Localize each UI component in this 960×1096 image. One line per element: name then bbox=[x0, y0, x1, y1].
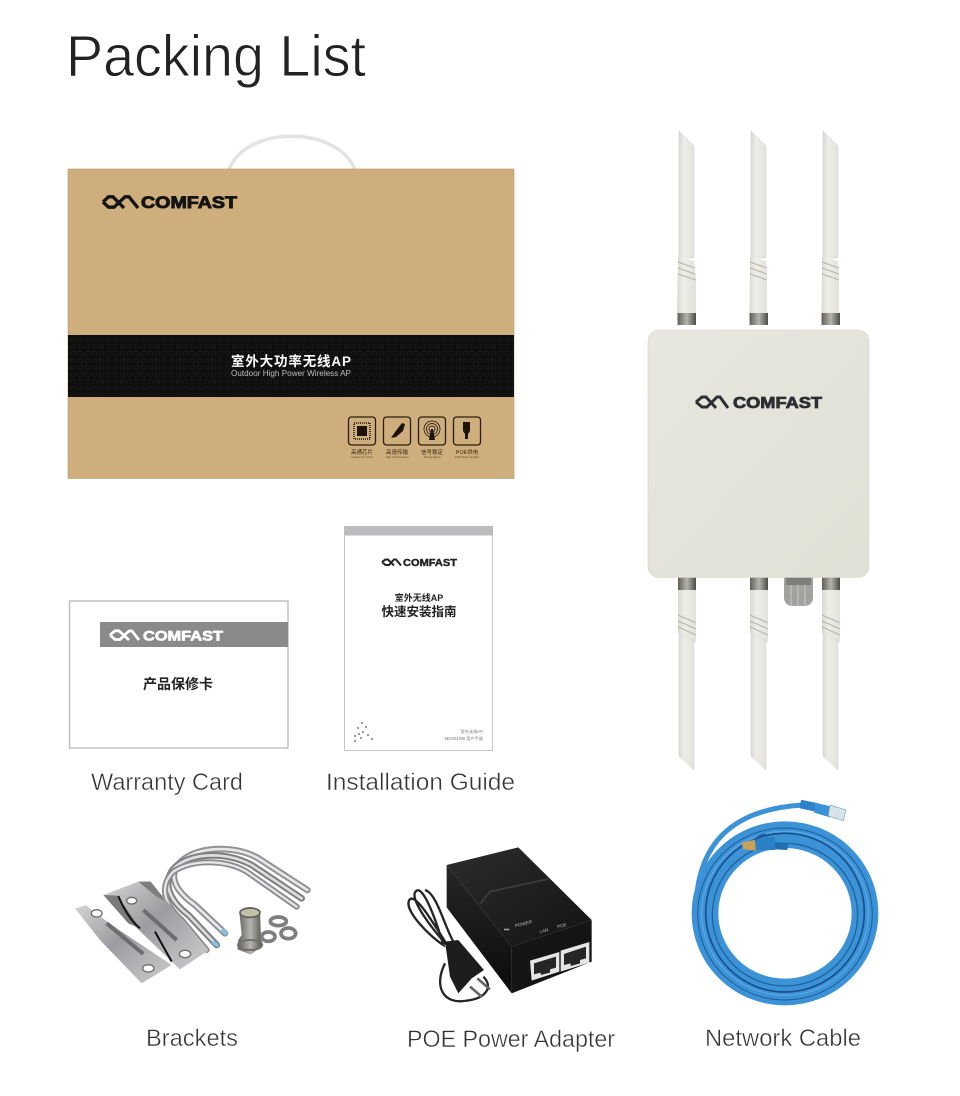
illustration: network cable bbox=[697, 800, 872, 1000]
adapter case bbox=[447, 847, 592, 947]
box feature icons: 高速传输 bbox=[386, 448, 408, 456]
black band: Outdoor High Power Wireless AP bbox=[231, 369, 351, 378]
guide title bbox=[381, 592, 457, 619]
top groove bbox=[480, 879, 548, 904]
box feature icons: Strong Signal bbox=[424, 455, 441, 459]
adapter left side bbox=[447, 865, 512, 993]
guide logo bbox=[382, 558, 457, 569]
guide model text: MD304J96 用户手册 bbox=[445, 735, 483, 742]
panel: installation guide bbox=[344, 526, 493, 750]
bottom antennas bbox=[678, 576, 840, 770]
label: warranty card: Warranty Card bbox=[91, 769, 243, 796]
top antennas bbox=[677, 131, 840, 325]
guide title: 快速安装指南 bbox=[381, 604, 457, 619]
box handle bbox=[229, 136, 355, 170]
port labels: POE bbox=[557, 922, 567, 929]
guide logo: COMFAST bbox=[403, 558, 457, 569]
cable coil bbox=[698, 828, 872, 1000]
guide qr ornament bbox=[354, 722, 373, 742]
port labels: LAN bbox=[539, 927, 549, 934]
guide model text: 室外无线AP bbox=[461, 728, 483, 735]
cable tail bbox=[697, 805, 803, 890]
mounting plates bbox=[75, 882, 208, 983]
label: network cable: Network Cable bbox=[705, 1025, 861, 1052]
adapter front bbox=[512, 920, 592, 993]
warranty card title: 产品保修卡 bbox=[143, 676, 213, 692]
ap logo bbox=[696, 395, 822, 412]
ethernet ports bbox=[530, 942, 589, 981]
panel: warranty card bbox=[70, 601, 288, 748]
port labels bbox=[504, 919, 567, 934]
label: poe power adapter: POE Power Adapter bbox=[407, 1026, 615, 1053]
u-bolts bbox=[165, 849, 307, 950]
illustration: brackets bbox=[75, 849, 307, 983]
ap body bbox=[648, 330, 869, 578]
warranty logo band: COMFAST bbox=[143, 628, 224, 644]
title: Packing List bbox=[66, 24, 366, 89]
box feature icons: 信号稳定 bbox=[421, 448, 443, 456]
cable gland bbox=[784, 577, 813, 606]
black band: 室外大功率无线AP bbox=[231, 353, 351, 369]
panel: retail box bbox=[68, 136, 514, 478]
guide model text bbox=[445, 728, 483, 742]
black band bbox=[68, 335, 514, 397]
box feature icons: 高通芯片 bbox=[351, 448, 373, 456]
box feature icons: POE供电 bbox=[456, 448, 479, 456]
box logo bbox=[103, 194, 237, 212]
box feature icons: Qualcomm Chips bbox=[351, 455, 373, 459]
label: brackets: Brackets bbox=[146, 1025, 238, 1052]
label: installation guide: Installation Guide bbox=[326, 769, 515, 796]
box logo: COMFAST bbox=[141, 194, 237, 212]
guide title: 室外无线AP bbox=[395, 592, 443, 603]
port labels: POWER bbox=[514, 919, 533, 928]
illustration: poe power adapter bbox=[408, 847, 592, 1001]
connector one bbox=[799, 800, 846, 821]
connector two bbox=[742, 835, 788, 851]
box feature icons bbox=[348, 417, 480, 459]
panel: outdoor access point bbox=[648, 131, 869, 770]
warranty logo band bbox=[100, 622, 288, 647]
power cord and plug bbox=[408, 890, 490, 1001]
ap logo: COMFAST bbox=[733, 395, 822, 412]
nut and washers bbox=[238, 908, 296, 955]
box feature icons: High Transmission bbox=[385, 455, 409, 459]
box feature icons: POE Power Supply bbox=[455, 455, 480, 459]
box body bbox=[68, 169, 514, 478]
